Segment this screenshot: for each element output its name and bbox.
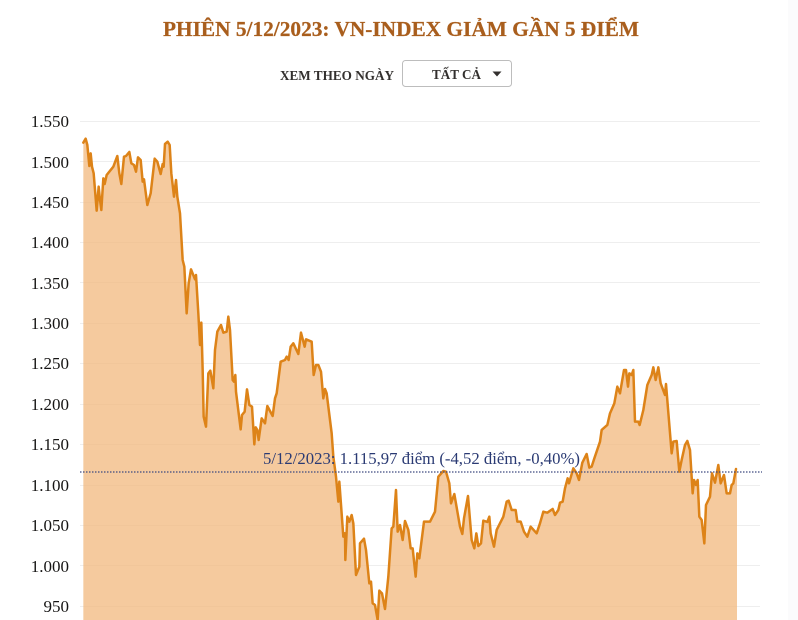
y-axis labels: 1.300: [31, 314, 69, 333]
y-axis labels: 1.450: [31, 193, 69, 212]
dropdown: [402, 60, 512, 86]
filter label: XEM THEO NGÀY: [280, 68, 394, 83]
annotation: latest close value: 5/12/2023: 1.115,97 điểm (-4,52 điểm, -0,40%): [263, 449, 580, 468]
y-axis labels: 1.200: [31, 395, 69, 414]
y-axis labels: 1.550: [31, 112, 69, 131]
y-axis labels: 1.350: [31, 274, 69, 293]
y-axis labels: 1.250: [31, 354, 69, 373]
y-axis labels: 1.500: [31, 153, 69, 172]
y-axis labels: 1.400: [31, 233, 69, 252]
title: PHIÊN 5/12/2023: VN-INDEX GIẢM GẦN 5 ĐIỂM: [163, 17, 639, 41]
dropdown: TẤT CẢ: [432, 67, 481, 82]
y-axis labels: 1.100: [31, 476, 69, 495]
y-axis labels: 1.150: [31, 435, 69, 454]
area chart: VN-Index: [83, 139, 737, 620]
y-axis labels: 1.000: [31, 557, 69, 576]
y-axis labels: 1.050: [31, 516, 69, 535]
area fill: [83, 139, 737, 620]
date filter control: [280, 60, 512, 86]
reference line: latest close: [80, 471, 762, 473]
y-axis labels: [31, 112, 69, 616]
index line: [83, 139, 736, 620]
y-axis labels: 950: [44, 597, 69, 616]
